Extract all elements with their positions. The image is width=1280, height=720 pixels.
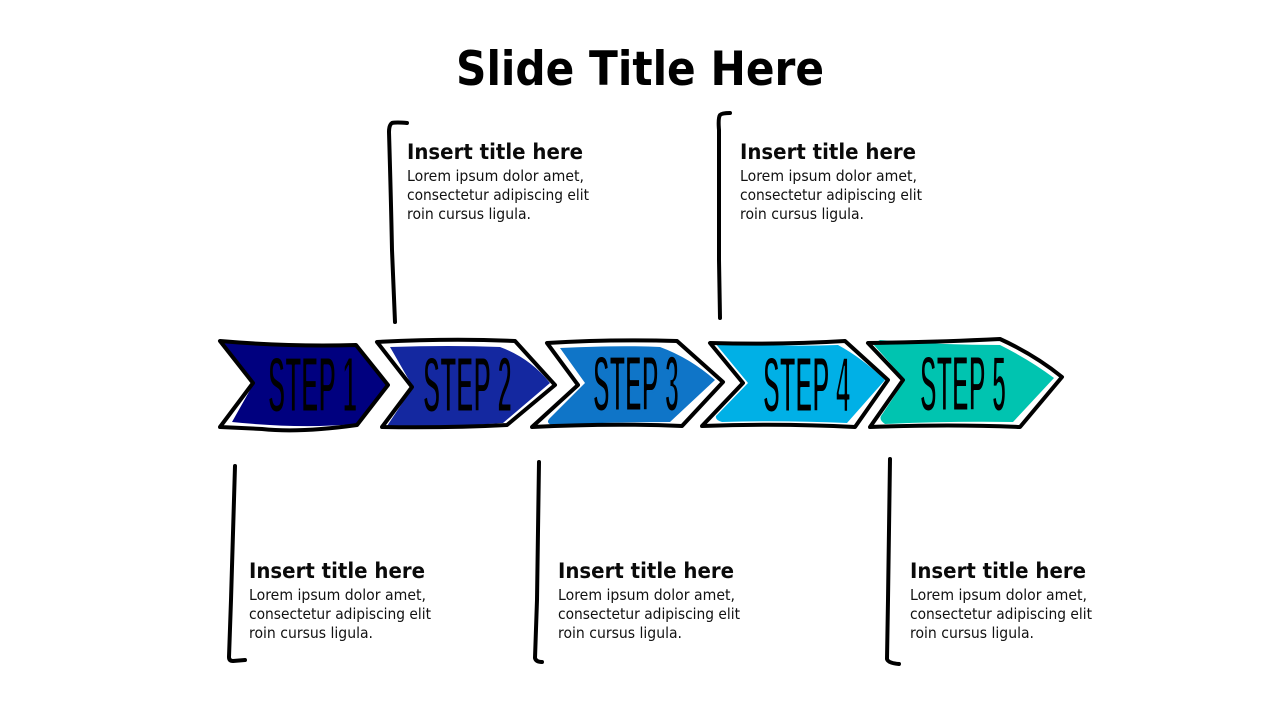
chevron: step 4 [702,340,888,429]
bracket [229,466,245,661]
callout text: consectetur adipiscing elit [740,186,922,204]
callout text: consectetur adipiscing elit [910,605,1092,623]
chevron process: five steps [220,339,1062,430]
callout text: consectetur adipiscing elit [407,186,589,204]
callout: bottom middle, step 3 [535,462,740,662]
title: Slide Title Here [456,42,824,97]
callout text: consectetur adipiscing elit [558,605,740,623]
chevron process: five steps: STEP 2 [423,340,512,429]
chevron: step 3 [532,339,723,428]
chevron: step 2 [377,340,555,429]
callout text [407,140,589,223]
chevron: step 5: STEP 5 [920,339,1006,428]
callout text: Insert title here [740,140,916,164]
callout text [249,559,431,642]
callout: top left, step 2 [389,122,589,322]
bracket [719,113,730,318]
callout text [910,559,1092,642]
chevron: step 5 [868,339,1062,428]
callout text: Lorem ipsum dolor amet, [407,167,584,185]
callout: bottom left, step 1 [229,466,431,661]
callout text: Lorem ipsum dolor amet, [910,586,1087,604]
callout text: Lorem ipsum dolor amet, [249,586,426,604]
callout: bottom right, step 5 [887,459,1092,664]
chevron: step 1 [220,340,388,430]
callout text [558,559,740,642]
callout text: Lorem ipsum dolor amet, [740,167,917,185]
callout: top right, step 4 [719,113,922,318]
callout text: Lorem ipsum dolor amet, [558,586,735,604]
chevron process: five steps: STEP 4 [763,340,850,429]
callout text: roin cursus ligula. [910,624,1034,642]
callout text: consectetur adipiscing elit [249,605,431,623]
chevron process: five steps: STEP 1 [268,340,357,429]
callout text: Insert title here [558,559,734,583]
callout text: Insert title here [407,140,583,164]
bracket [389,122,407,322]
bracket [535,462,542,662]
callout text: roin cursus ligula. [407,205,531,223]
chevron process: five steps: STEP 3 [593,339,679,428]
callout text: roin cursus ligula. [740,205,864,223]
callout text: roin cursus ligula. [558,624,682,642]
callout text [740,140,922,223]
callout text: roin cursus ligula. [249,624,373,642]
callout text: Insert title here [249,559,425,583]
bracket [887,459,899,664]
callout text: Insert title here [910,559,1086,583]
